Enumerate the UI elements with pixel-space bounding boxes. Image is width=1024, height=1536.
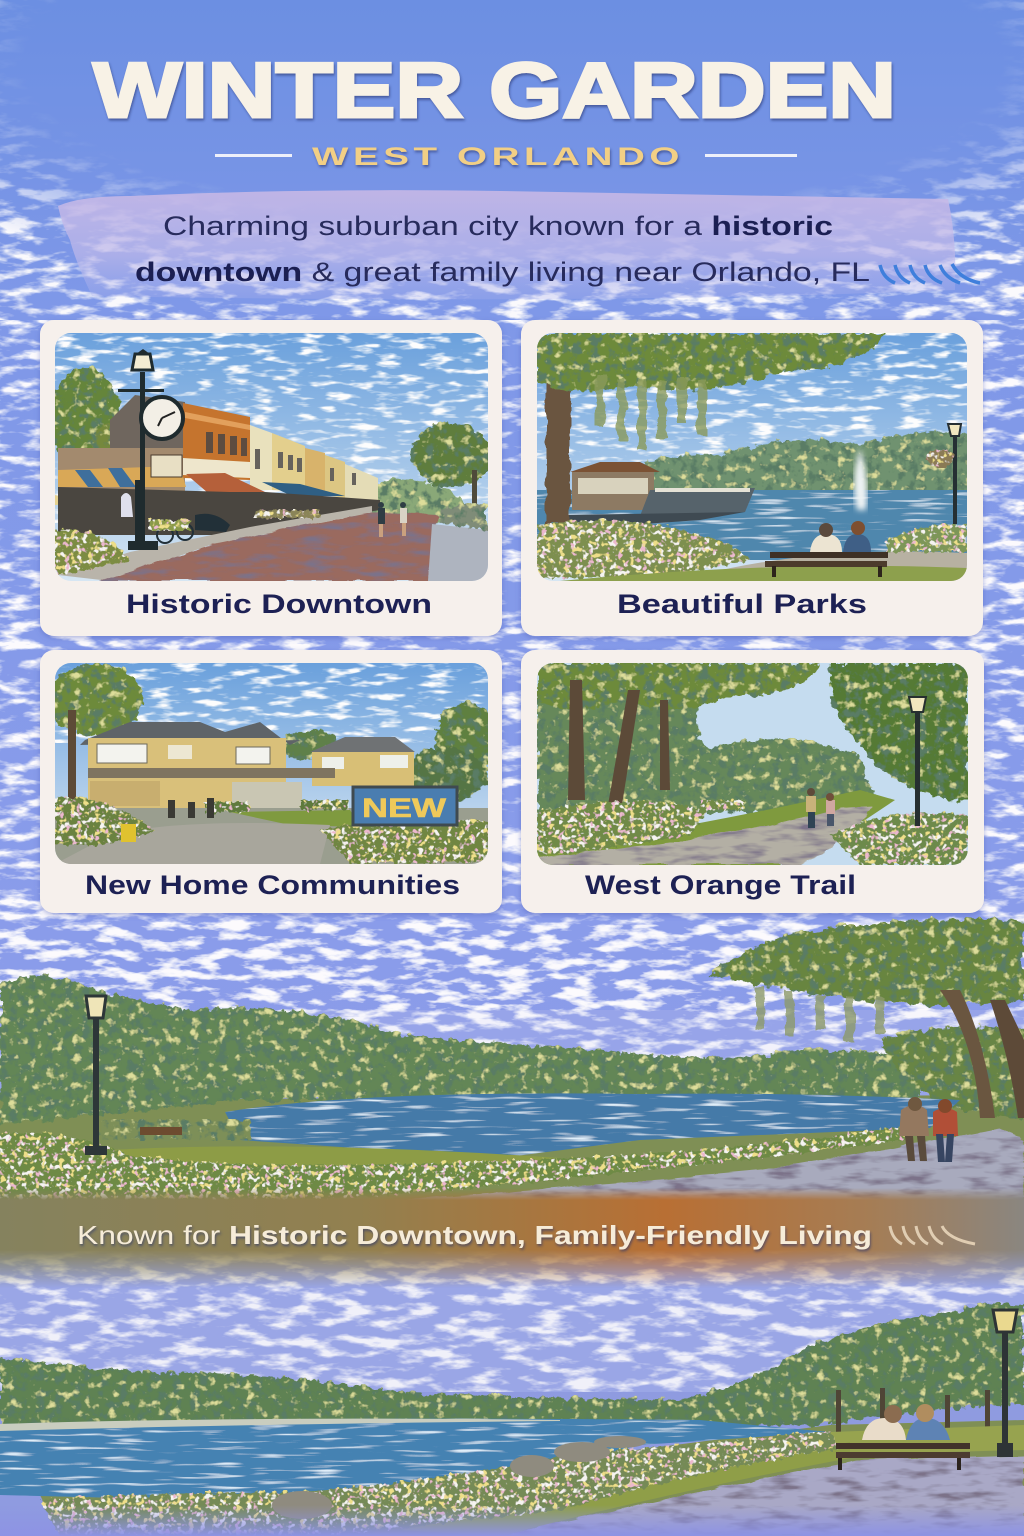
- sign: new: [353, 787, 457, 825]
- intro ribbon: [58, 190, 980, 299]
- subtitle: west orlando: [215, 143, 797, 171]
- panel: new home communities: [40, 650, 502, 913]
- intro text line 1: Charming suburban city known for a historic: [163, 211, 833, 241]
- scene: new homes with sign: [47, 663, 495, 864]
- seated couple on bench: [836, 1404, 970, 1470]
- panel: west orange trail: [521, 650, 984, 913]
- label: new home communities: New Home Communities: [85, 870, 460, 900]
- banner: known for: [0, 1188, 1024, 1288]
- subtitle: west orlando: WEST ORLANDO: [312, 143, 684, 171]
- scene: shaded trail: [537, 663, 968, 865]
- lamp post: [993, 1310, 1017, 1457]
- panel: beautiful parks: [521, 320, 983, 636]
- intro text line 2: downtown & great family living near Orlando, FL: [135, 257, 870, 287]
- icon: cream swoosh waves: [890, 1226, 975, 1244]
- scene: lakeside bench panorama: [0, 1250, 1024, 1536]
- background: cloudy periwinkle sky: [0, 0, 1024, 1020]
- label: west orange trail: West Orange Trail: [585, 870, 856, 900]
- scene: downtown street: [49, 333, 492, 581]
- title: WINTER GARDEN: [93, 46, 896, 134]
- sign: new: NEW: [362, 793, 447, 823]
- panel: historic downtown: [40, 320, 502, 636]
- scene: lake park with fountain: [537, 333, 975, 581]
- banner text: Known for Historic Downtown, Family-Friendly Living: [77, 1220, 872, 1250]
- icon: blue swoosh waves: [880, 264, 980, 283]
- scene: lake panorama: [0, 918, 1024, 1205]
- label: beautiful parks: Beautiful Parks: [617, 589, 867, 619]
- label: historic downtown: Historic Downtown: [126, 589, 432, 619]
- walking couple: [899, 1097, 958, 1162]
